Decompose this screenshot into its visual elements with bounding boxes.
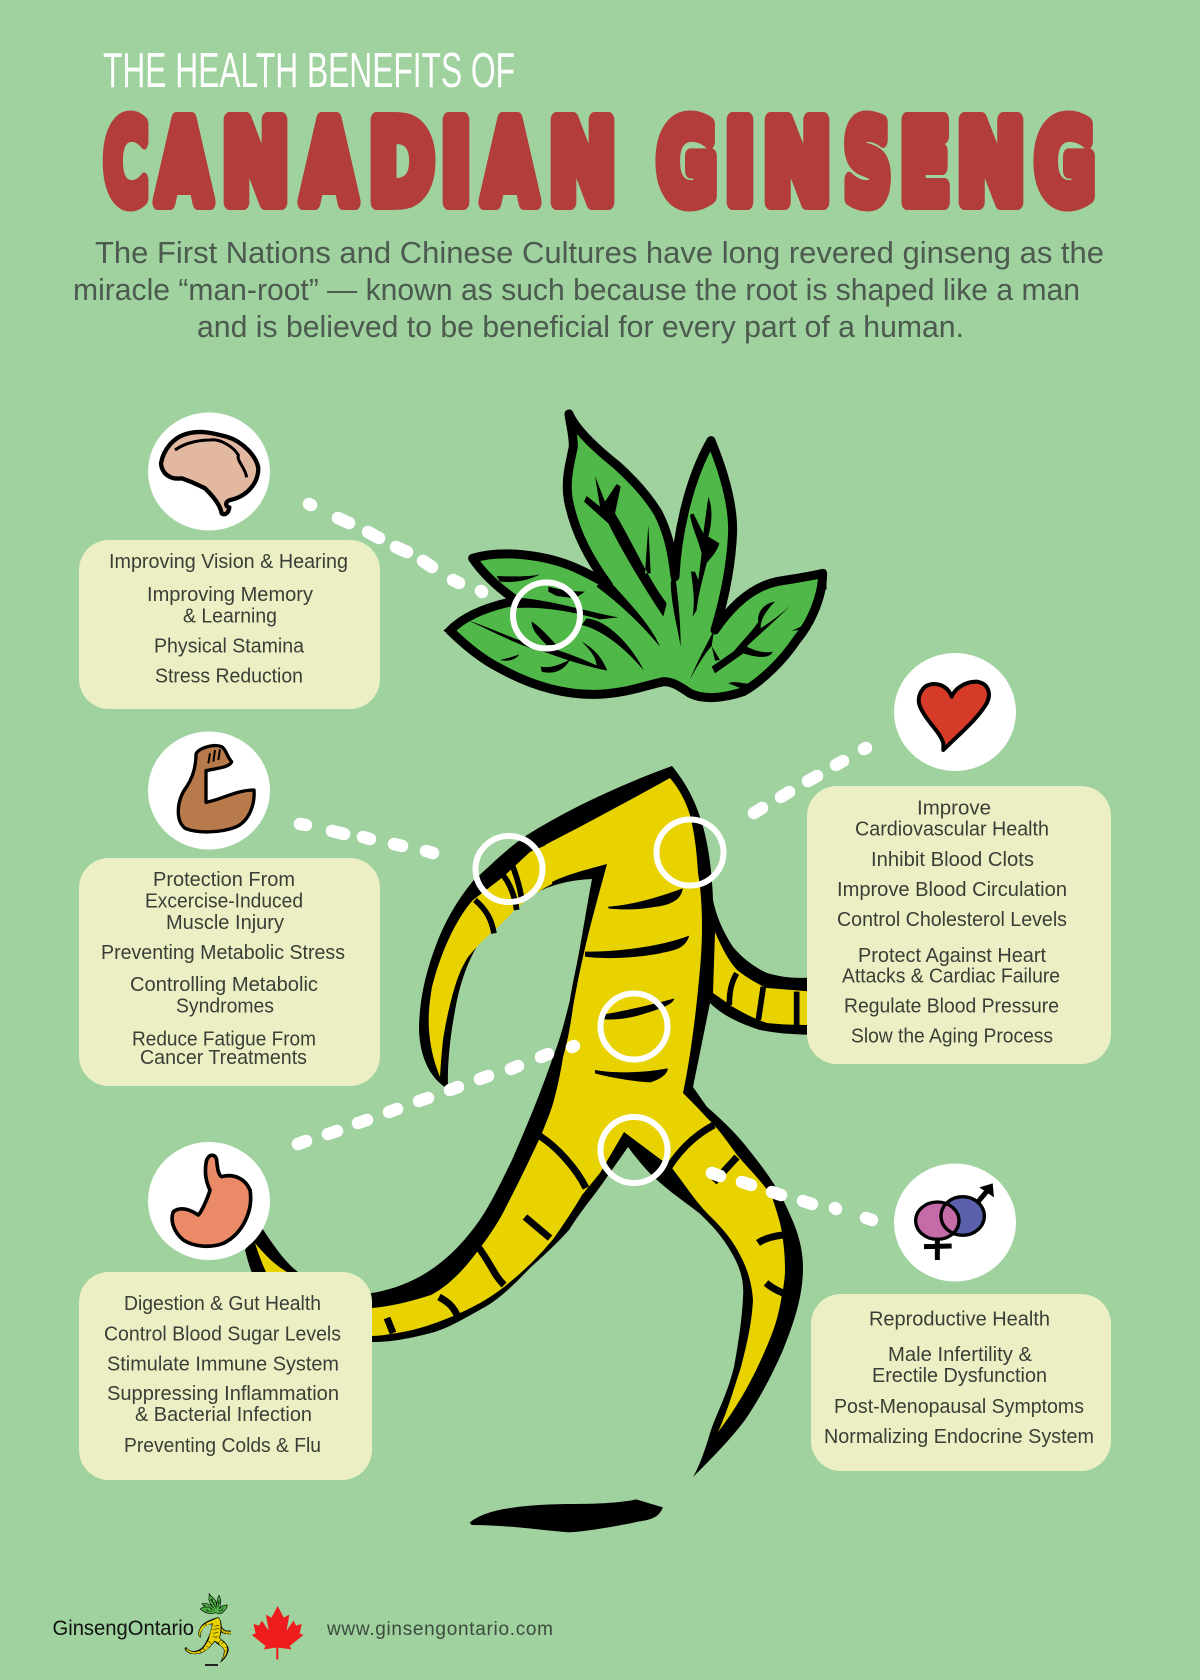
panel: muscle benefits: Syndromes [176, 994, 274, 1018]
title: Canadian Ginseng: N [957, 99, 1025, 229]
title: Canadian Ginseng: S [844, 99, 891, 229]
panel: brain benefits [79, 540, 380, 709]
panel: reproductive benefits: Erectile Dysfunction [872, 1364, 1047, 1387]
panel: brain benefits: Improving Memory [147, 583, 314, 606]
panel: digestion benefits: Control Blood Sugar Levels [104, 1322, 341, 1346]
illustration: ginseng leaves [443, 414, 827, 698]
title: Canadian Ginseng: D [369, 99, 434, 229]
panel: digestion benefits: Preventing Colds & Flu [124, 1434, 321, 1457]
intro paragraph: and is believed to be beneficial for every part of a human. [197, 309, 964, 344]
footer website url: www.ginsengontario.com [326, 1619, 553, 1640]
title: Canadian Ginseng: N [222, 99, 289, 229]
icon: stomach [148, 1142, 270, 1260]
title: Canadian Ginseng: N [549, 99, 616, 229]
panel: heart benefits: Control Cholesterol Levels [837, 908, 1067, 931]
panel: muscle benefits: Preventing Metabolic Stress [101, 941, 345, 964]
dotted connector: brain [309, 504, 482, 592]
panel: brain benefits: Improving Vision & Hearing [109, 550, 348, 573]
panel: muscle benefits: Controlling Metabolic [130, 973, 318, 996]
illustration: ginseng root body [245, 766, 830, 1477]
panel: reproductive benefits [811, 1294, 1111, 1471]
intro paragraph: The First Nations and Chinese Cultures have long revered ginseng as the [95, 235, 1104, 270]
title: Canadian Ginseng [104, 99, 1095, 229]
title: Canadian Ginseng: I [441, 99, 471, 229]
title: the health benefits of: THE HEALTH BENEFITS OF [103, 44, 515, 98]
root markings [475, 866, 797, 1082]
title: Canadian Ginseng: N [763, 99, 831, 229]
dotted connector: muscle [300, 824, 433, 853]
panel: heart benefits: Protect Against Heart [858, 944, 1046, 967]
dotted connector: stomach [298, 1046, 574, 1144]
intro paragraph [73, 235, 1104, 344]
panel: muscle benefits: Cancer Treatments [140, 1046, 307, 1069]
panel: heart benefits: Cardiovascular Health [855, 818, 1049, 840]
white target rings [476, 582, 724, 1183]
title: Canadian Ginseng: A [157, 99, 211, 229]
panel: heart benefits [807, 786, 1111, 1064]
panel: digestion benefits [79, 1272, 372, 1480]
panel: reproductive benefits: Normalizing Endocrine System [824, 1425, 1094, 1448]
panel: muscle benefits [79, 858, 380, 1086]
panel: heart benefits: Regulate Blood Pressure [844, 994, 1059, 1018]
icon: brain [148, 412, 270, 530]
panel: heart benefits: Slow the Aging Process [851, 1024, 1053, 1048]
title: Canadian Ginseng: I [725, 99, 755, 229]
panel: reproductive benefits: Reproductive Health [869, 1308, 1050, 1330]
intro paragraph: miracle “man-root” — known as such because the root is shaped like a man [73, 272, 1080, 307]
title: Canadian Ginseng: G [1035, 99, 1095, 229]
title: Canadian Ginseng: A [302, 99, 356, 229]
panel: muscle benefits: Muscle Injury [166, 911, 285, 934]
root silhouette [245, 766, 830, 1477]
panel: digestion benefits: Digestion & Gut Health [124, 1292, 321, 1315]
icon: maple leaf [252, 1606, 303, 1659]
dotted connector: heart [754, 748, 866, 813]
panel: digestion benefits: & Bacterial Infection [135, 1403, 312, 1426]
icon: heart [894, 653, 1016, 771]
panel: reproductive benefits: Male Infertility & [888, 1343, 1032, 1366]
panel: brain benefits: Stress Reduction [155, 664, 303, 688]
panel: muscle benefits: Protection From [153, 868, 295, 891]
panel: heart benefits: Inhibit Blood Clots [871, 848, 1034, 871]
title: Canadian Ginseng: C [104, 99, 148, 229]
title: Canadian Ginseng: E [900, 99, 950, 229]
icon: male and female symbols [894, 1164, 1016, 1282]
title: Canadian Ginseng: A [483, 99, 537, 229]
root yellow flesh [255, 778, 830, 1432]
footer logo: GinsengOntario [52, 1593, 231, 1666]
panel: brain benefits: & Learning [183, 604, 277, 628]
panel: digestion benefits: Stimulate Immune System [107, 1352, 339, 1376]
logo leaves [200, 1593, 228, 1614]
panel: reproductive benefits: Post-Menopausal Symptoms [834, 1395, 1084, 1418]
icon: muscle [148, 732, 270, 850]
panel: heart benefits: Attacks & Cardiac Failure [842, 964, 1060, 988]
logo root [185, 1617, 231, 1663]
panel: digestion benefits: Suppressing Inflammation [107, 1382, 339, 1405]
logo shadow [205, 1664, 218, 1666]
panel: heart benefits: Improve Blood Circulation [837, 878, 1067, 901]
logo wordmark: GinsengOntario [52, 1616, 194, 1640]
title: Canadian Ginseng: G [657, 99, 717, 229]
panel: heart benefits: Improve [917, 796, 991, 820]
root shadow [470, 1499, 663, 1532]
dotted connector: reproductive [712, 1173, 872, 1220]
panel: muscle benefits: Excercise-Induced [145, 890, 303, 912]
panel: brain benefits: Physical Stamina [154, 634, 305, 658]
panel: muscle benefits: Reduce Fatigue From [132, 1028, 316, 1050]
